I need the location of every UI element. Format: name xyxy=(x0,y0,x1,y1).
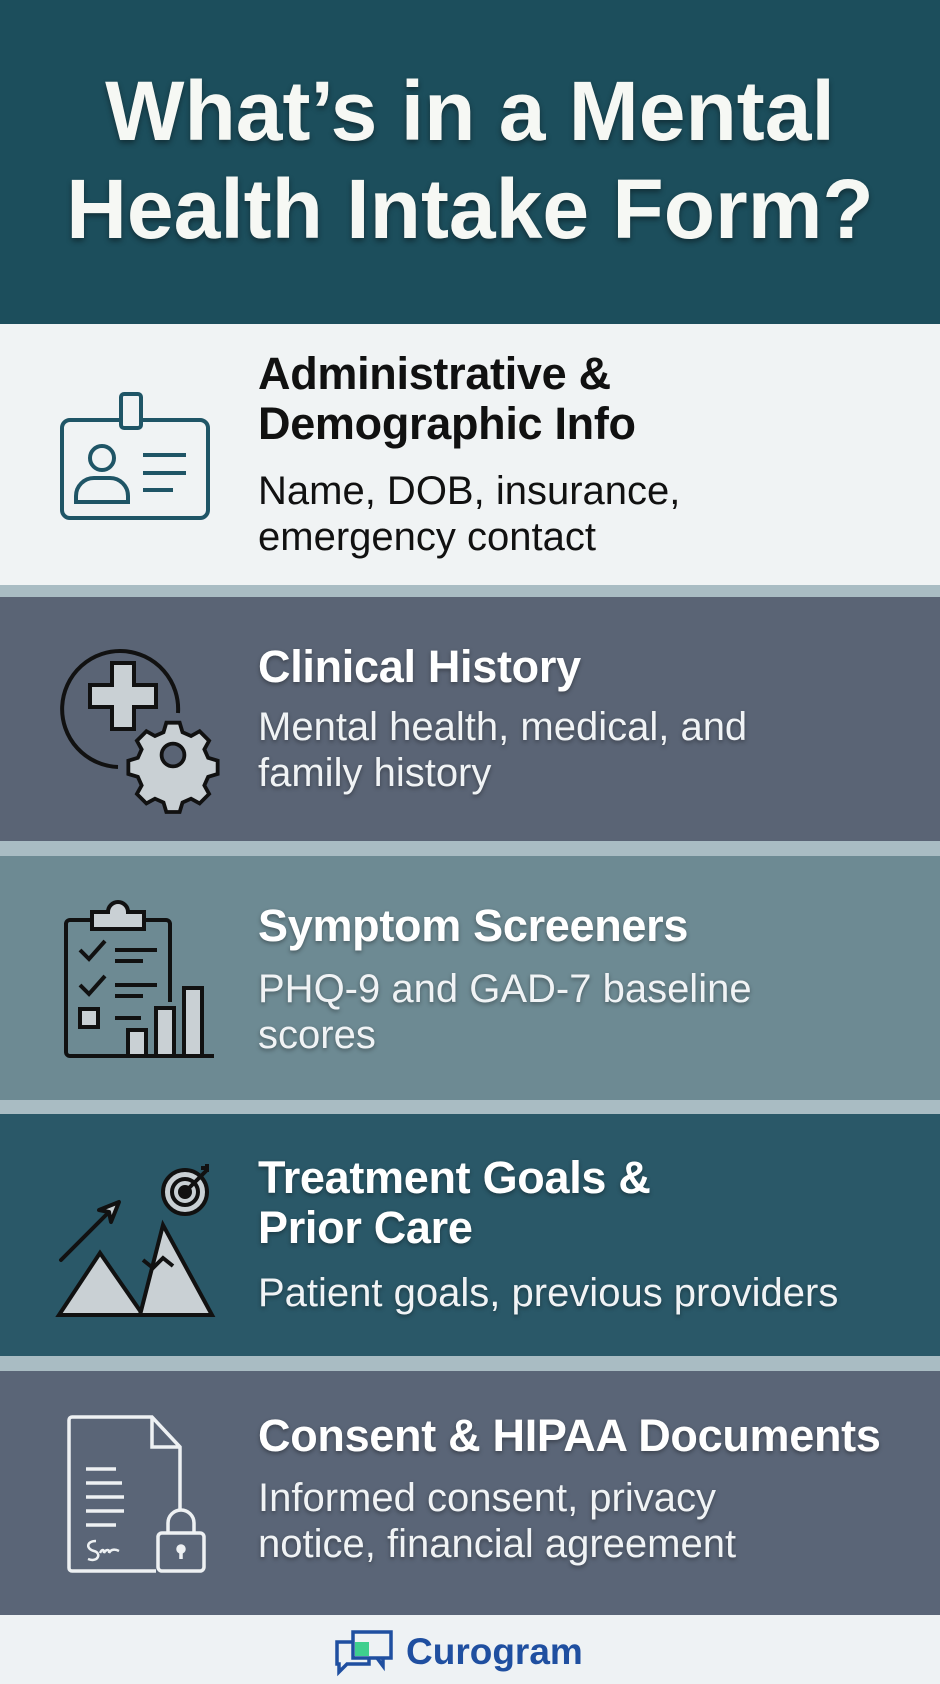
heading: Treatment Goals & xyxy=(258,1152,651,1203)
text: notice, financial agreement xyxy=(258,1522,736,1566)
text xyxy=(258,469,680,559)
heading: Clinical History xyxy=(258,641,581,692)
heading: Prior Care xyxy=(258,1202,473,1253)
icon: document lock xyxy=(67,1415,206,1573)
heading: Demographic Info xyxy=(258,398,636,449)
icon: chat bubbles xyxy=(335,1630,393,1676)
text xyxy=(258,1476,736,1569)
title: What’s in a Mental xyxy=(105,64,835,158)
icon: clipboard chart xyxy=(64,900,214,1058)
panel: consent xyxy=(0,1371,940,1615)
icon: cross gear xyxy=(60,649,220,814)
text xyxy=(258,705,747,798)
heading: Administrative & xyxy=(258,348,611,399)
footer logo xyxy=(335,1630,583,1676)
text: family history xyxy=(258,751,491,795)
panel: symptom screeners xyxy=(0,856,940,1100)
text xyxy=(258,967,752,1057)
title: Health Intake Form? xyxy=(66,162,874,256)
text: emergency contact xyxy=(258,515,596,559)
icon: mountain target xyxy=(55,1164,216,1317)
text: Patient goals, previous providers xyxy=(258,1271,838,1315)
header xyxy=(0,0,940,324)
text: scores xyxy=(258,1013,376,1057)
brand name: Curogram xyxy=(406,1631,583,1672)
heading xyxy=(258,1152,651,1253)
text: PHQ-9 and GAD-7 baseline xyxy=(258,967,752,1011)
heading xyxy=(258,348,636,449)
text: Mental health, medical, and xyxy=(258,705,747,749)
panel: treatment goals xyxy=(0,1114,940,1356)
panel: administrative xyxy=(0,324,940,585)
heading: Consent & HIPAA Documents xyxy=(258,1410,881,1461)
heading: Symptom Screeners xyxy=(258,900,688,951)
panel: clinical history xyxy=(0,597,940,841)
icon: id badge xyxy=(60,392,210,520)
text: Informed consent, privacy xyxy=(258,1476,716,1520)
text: Name, DOB, insurance, xyxy=(258,469,680,513)
title xyxy=(66,64,874,256)
